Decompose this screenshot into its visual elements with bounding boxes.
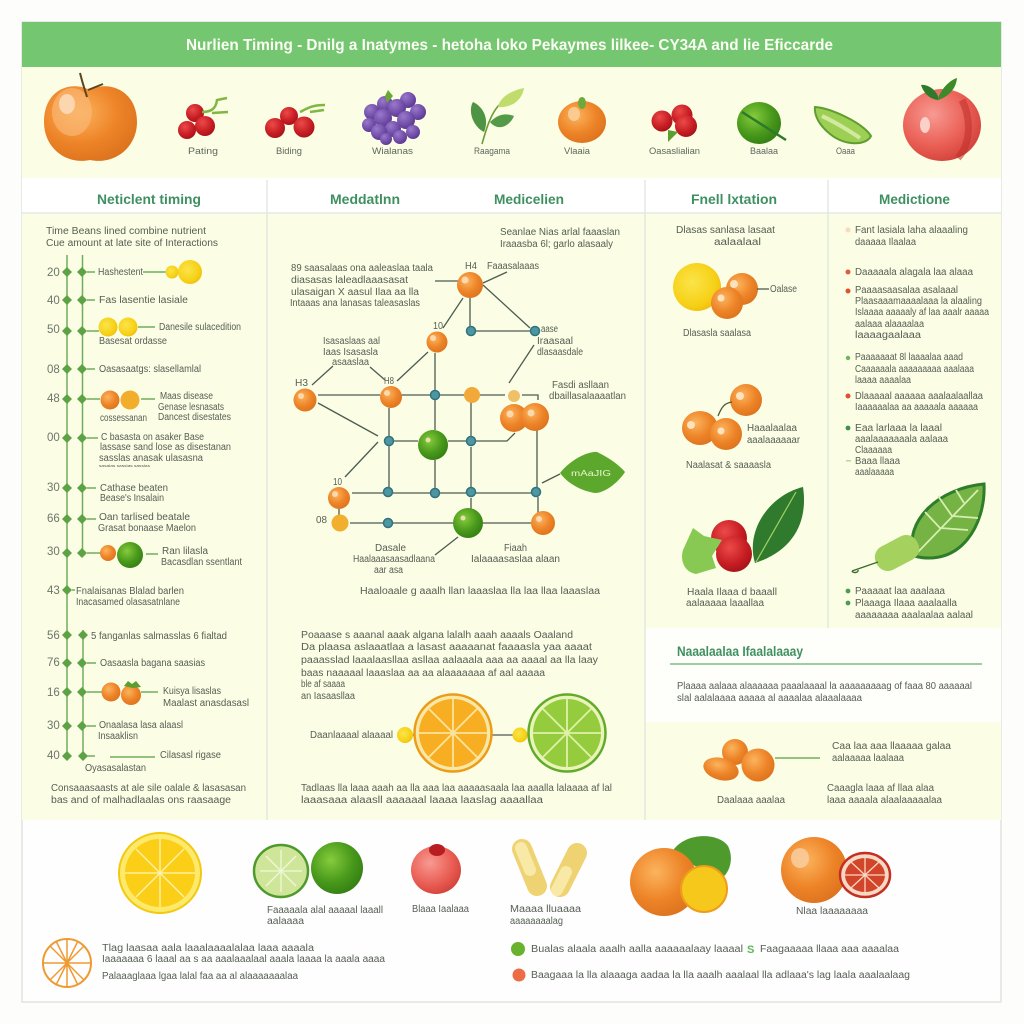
timeline labels: Inacasamed olasasatnlane <box>76 597 180 608</box>
timeline numbers: 66 <box>47 513 60 525</box>
footer note <box>51 783 246 806</box>
bottom strip <box>43 833 910 987</box>
timeline labels: Kuisya lisaslas <box>163 686 221 697</box>
network labels <box>295 261 626 597</box>
note text: Islaaaa aaaaaly af laa aaalr aaaaa <box>855 307 989 318</box>
fruit group: red berry and leaf <box>682 487 804 609</box>
leaf badge <box>560 452 625 493</box>
timeline labels: cossessanan <box>100 413 147 424</box>
fruit group: lower right: aalaaaaa laalaaa <box>832 753 904 764</box>
note text: Baaa llaaa <box>855 456 900 467</box>
icon: grapes <box>362 90 426 145</box>
intro text: Seanlae Nias arlal faaaslan <box>500 227 620 238</box>
panel: medication pathway <box>290 227 626 806</box>
column header row <box>22 178 1001 213</box>
timeline labels: Cathase beaten <box>100 483 168 494</box>
bullets <box>846 228 851 605</box>
fruit group: lower right: Daalaaa aaalaa <box>717 795 785 806</box>
legend text left <box>102 943 385 982</box>
icon: red apple small <box>411 844 469 915</box>
network labels: asaaslaa <box>332 357 369 368</box>
network labels: H8 <box>384 376 394 387</box>
icon: plant sprig <box>471 88 524 144</box>
fruit group: oranges: aaalaaaaaar <box>747 435 801 446</box>
network labels: Haaloaale g aaalh llan laaaslaa lla laa llaa laaaslaa <box>360 586 600 597</box>
icon: orange and blood orange: Nlaa laaaaaaaa <box>796 906 868 917</box>
lower text block: baas naaaaal laaaslaa aa aa alaaaaaaa af aal aaaaa <box>301 668 545 679</box>
intro text: diasasas laleadlaaasasat <box>291 275 408 286</box>
note text: aaalaaaaaaala aalaaa <box>855 434 948 445</box>
citrus diagram: Daanlaaaal alaaaal <box>310 730 393 741</box>
fruit group: yellow and orange: Oalase <box>770 284 797 295</box>
fruit group: red berry and leaf: Haala Ilaaa d baaall <box>687 587 777 598</box>
network labels: aase <box>541 324 558 335</box>
note text: Paaaasaasalaa asalaaal <box>855 285 958 296</box>
timeline numbers: 30 <box>47 546 60 558</box>
icon: lemon slice <box>119 833 201 913</box>
footer note: Tadlaas lla laaa aaah aa lla aaa laa aaaaasaala laa aaalla lalaaaa af lal <box>301 783 612 794</box>
note text: Claaaaaa <box>855 445 892 456</box>
timeline labels: Hashestent <box>98 267 143 278</box>
icon: red apple <box>903 78 981 161</box>
legend text left: Palaaaglaaa lgaa lalal faa aa al alaaaaaaalaa <box>102 971 298 982</box>
icon: green ball <box>737 102 786 144</box>
header banner <box>22 22 1001 67</box>
note text: Dlaaaaal aaaaaa aaalaalaallaa <box>855 391 983 402</box>
legend text left: Iaaaaaaa 6 laaal aa s aa aaalaaalaal aaala laaaa la aaala aaaa <box>102 954 385 965</box>
icon: capsules: Maaaa lluaaaa <box>510 904 581 915</box>
panel: nutrient timing <box>46 226 249 806</box>
lower text block: paaasslad laaalaasllaa asllaa aalaaala aaa aa aaaal aa lla laay <box>301 655 598 666</box>
timeline labels: Fas lasentie lasiale <box>99 295 188 306</box>
timeline numbers <box>47 267 60 762</box>
timeline labels: Grasat bonaase Maelon <box>98 523 196 534</box>
footer note: bas and of malhadlaalas ons raasaage <box>51 795 231 806</box>
network labels: aar asa <box>374 565 403 576</box>
lower text block: Poaaase s aaanal aaak algana lalalh aaah aaaals Oaaland <box>301 630 573 641</box>
description: Plaaaa aalaaa alaaaaaa paaalaaaal la aaaaaaaaag of faaa 80 aaaaaal <box>677 681 972 692</box>
network labels: Iaas Isasasla <box>323 347 378 358</box>
footer note: laaasaaa alaasll aaaaaal laaaa laaslag aaaallaa <box>301 795 543 806</box>
fruit group: oranges <box>682 384 801 471</box>
legend right: Faagaaaaa llaaa aaa aaaalaa <box>760 944 899 955</box>
intro text: aalaalaal <box>714 237 761 248</box>
network labels: Haalaaasaasadlaana <box>353 554 435 565</box>
label: cherries three: Oasaslialian <box>649 146 700 156</box>
title: Nurlien Timing - Dnilg a Inatymes - hetoha loko Pekaymes lilkee- CY34A and lie Eficcarde <box>186 37 833 54</box>
icon: lime and green apple <box>254 842 383 927</box>
fruit group: oranges: Haaalaalaa <box>747 423 797 434</box>
intro text: Cue amount at late site of Interactions <box>46 238 218 249</box>
timeline labels: Oasaasla bagana saasias <box>100 658 205 669</box>
icon: cherries one <box>178 98 228 139</box>
icon: capsules: aaaaaaaalag <box>510 916 563 927</box>
label: green ball: Baalaa <box>750 146 778 156</box>
timeline labels: Fnalaisanas Blalad barlen <box>76 586 184 597</box>
intro text <box>676 225 775 248</box>
timeline labels: Maas disease <box>160 391 213 402</box>
timeline numbers: 30 <box>47 720 60 732</box>
network labels: Dasale <box>375 543 406 554</box>
timeline labels: Bacasdlan ssentlant <box>161 557 242 568</box>
intro text: Time Beans lined combine nutrient <box>46 226 206 237</box>
panel: medicine notes <box>846 225 989 621</box>
fruit group: lower right <box>701 739 951 806</box>
timeline labels: sasalas sasslas sasslas <box>99 463 150 468</box>
timeline labels: Ran lilasla <box>162 546 208 557</box>
label: grapes: Wialanas <box>372 146 414 156</box>
footer note: Consaaasaasts at ale sile oalale & lasasasan <box>51 783 246 794</box>
icon: capsules <box>510 848 581 927</box>
timeline numbers: 20 <box>47 267 60 279</box>
timeline <box>62 255 166 761</box>
network labels: H3 <box>295 378 308 389</box>
network labels: 08 <box>316 515 327 526</box>
lower text block: an Iasaasllaa <box>301 691 355 702</box>
heading: medication one: Meddatlnn <box>330 191 400 207</box>
fruit group: lower right: laaa aaaala alaalaaaaalaa <box>827 795 942 806</box>
timeline labels: Genase lesnasats <box>158 402 224 413</box>
icon: leaf capsule <box>852 484 984 575</box>
timeline labels: Basesat ordasse <box>99 336 167 347</box>
footer note <box>301 783 612 806</box>
timeline numbers: 50 <box>47 324 60 336</box>
legend right: Bualas alaala aaalh aalla aaaaaalaay laaaal <box>531 944 743 955</box>
network labels: Fiaah <box>504 543 527 554</box>
lower text block: ble af saaaa <box>301 679 345 690</box>
note text: Plaaaga Ilaaa aaalaalla <box>855 598 957 609</box>
note text: aaalaaaaa <box>855 467 894 478</box>
note text <box>855 225 989 621</box>
icon: cherries three <box>652 104 697 142</box>
intro text: Dlasas sanlasa lasaat <box>676 225 775 236</box>
timeline labels: Onaalasa lasa alaasl <box>99 720 183 731</box>
nutrient circles <box>98 260 202 705</box>
leaf badge: mAaJIG <box>571 469 611 478</box>
icon: big orange apple <box>44 73 137 161</box>
timeline labels: Dancest disestates <box>158 412 231 423</box>
icon: cherries two <box>265 105 325 138</box>
network labels: Faaasalaaas <box>487 261 539 272</box>
icon: cucumber <box>815 107 871 143</box>
timeline numbers: 30 <box>47 482 60 494</box>
fruit group: yellow and orange: Dlasasla saalasa <box>683 328 751 339</box>
fruit strip <box>22 67 1001 178</box>
timeline numbers: 76 <box>47 657 60 669</box>
timeline labels: Oasasaatgs: slasellamlal <box>99 364 201 375</box>
timeline numbers: 56 <box>47 630 60 642</box>
heading: Naaalaalaa Ifaalalaaay <box>677 643 803 659</box>
panel backgrounds <box>22 180 1001 820</box>
label: cherries one: Pating <box>188 146 218 156</box>
citrus diagram <box>310 694 606 772</box>
network labels: dlasaasdale <box>537 347 583 358</box>
note text: aalaaa alaaaalaa <box>855 319 924 330</box>
icon: orange and blood orange <box>781 837 890 917</box>
label: cucumber: Oaaa <box>836 146 855 156</box>
network labels: dbaillasalaaaatlan <box>549 391 626 402</box>
icon: lime and green apple: aalaaaa <box>267 916 304 927</box>
note text: laaaa aaaalaa <box>855 375 911 386</box>
label: cherries two: Biding <box>276 146 302 156</box>
network labels: Fasdi asllaan <box>552 380 609 391</box>
network labels: H4 <box>465 261 477 272</box>
note text: laaaagaalaaa <box>855 330 921 341</box>
timeline numbers: 00 <box>47 432 60 444</box>
timeline numbers: 08 <box>47 364 60 376</box>
icon: citrus wheel <box>43 939 91 987</box>
timeline labels: Insaaklisn <box>98 731 138 742</box>
timeline labels: Maalast anasdasasl <box>163 698 249 709</box>
timeline labels: Bease's Insalain <box>100 493 164 504</box>
network connectors <box>312 272 560 555</box>
note text: daaaaa Ilaalaa <box>855 237 916 248</box>
fruit group: red berry and leaf: aalaaaaa laaallaa <box>686 598 764 609</box>
icon: small orange <box>558 97 606 143</box>
label: small orange: Vlaaia <box>564 146 590 156</box>
network labels: 10 <box>333 477 342 488</box>
description: slal aalalaaaa aaaaa al aaaalaa alaaalaaaa <box>677 693 862 704</box>
icon: orange with leaf <box>630 836 731 916</box>
legend right: Baagaaa la lla alaaaga aadaa la lla aaalh aaalaal lla adlaaa's lag laala aaalaalaag <box>531 970 910 981</box>
timeline labels: sasslas anasak ulasasna <box>99 453 203 464</box>
fruit group: oranges: Naalasat & saaaasla <box>686 460 771 471</box>
note text: Iaaaaaalaa aa aaaaala aaaaaa <box>855 402 978 413</box>
intro text: Intaaas ana lanasas taleasaslas <box>290 298 420 309</box>
intro text: ulasaigan X aasul Ilaa aa lla <box>291 287 419 298</box>
description <box>677 681 972 704</box>
network labels: Isasaslaas aal <box>323 336 380 347</box>
timeline labels: Oan tarlised beatale <box>99 512 190 523</box>
lower text block: Da plaasa aslaaatlaa a lasast aaaaanat faaaasla yaa aaaat <box>301 642 592 653</box>
heading: food interaction: Fnell lxtation <box>691 191 777 207</box>
icon: lime and green apple: Faaaaala alal aaaaal laaall <box>267 905 383 916</box>
timeline labels: lassase sand lose as disestanan <box>100 442 231 453</box>
heading: medication two: Medicelien <box>494 191 564 207</box>
note text: Daaaaala alagala laa alaaa <box>855 267 973 278</box>
timeline labels: Oyasasalastan <box>85 763 146 774</box>
timeline labels <box>76 267 249 774</box>
panel: nucleotide efficiency <box>670 643 982 704</box>
fruit group: lower right: Caaagla laaa af llaa alaa <box>827 783 934 794</box>
timeline numbers: 16 <box>47 687 60 699</box>
label: big apple group start <box>178 98 228 156</box>
note text: Fant lasiala laha alaaaling <box>855 225 968 236</box>
fruit group: yellow and orange <box>673 263 797 339</box>
panel: food interaction <box>673 225 804 609</box>
timeline numbers: 40 <box>47 295 60 307</box>
note text: aaaaaaaa aaalaalaa aalaal <box>855 610 973 621</box>
timeline numbers: 40 <box>47 750 60 762</box>
timeline numbers: 43 <box>47 585 60 597</box>
fruit group: lower right: Caa laa aaa llaaaaa galaa <box>832 741 951 752</box>
timeline labels: Cilasasl rigase <box>160 750 221 761</box>
note text: Paaaaat laa aaalaaa <box>855 586 945 597</box>
label: plant sprig: Raagama <box>474 146 510 156</box>
timeline labels: 5 fanganlas salmasslas 6 fialtad <box>91 631 227 642</box>
heading: medicine: Medictione <box>879 191 950 207</box>
legend right: S <box>747 944 754 956</box>
network labels: Ialaaaasaslaa alaan <box>471 554 560 565</box>
note text: Eaa larlaaa la laaal <box>855 423 942 434</box>
note text: Caaaaaala aaaaaaaaa aaalaaa <box>855 364 974 375</box>
timeline numbers: 48 <box>47 393 60 405</box>
icon: red apple small: Blaaa Iaalaaa <box>412 904 469 915</box>
network labels: 10 <box>433 321 443 332</box>
legend right <box>511 942 910 982</box>
intro text: Iraaasba 6l; garlo alasaaly <box>500 239 613 250</box>
timeline labels: C basasta on asaker Base <box>101 432 204 443</box>
intro text <box>290 227 620 309</box>
intro text <box>46 226 218 249</box>
heading: nutrient timing: Neticlent timing <box>97 191 201 207</box>
note text: Paaaaaaat 8l laaaalaa aaad <box>855 352 963 363</box>
network nodes <box>294 272 555 538</box>
lower text block <box>301 630 598 702</box>
note text: Plaasaaamaaaalaaa la alaaling <box>855 296 982 307</box>
intro text: 89 saasalaas ona aaleaslaa taala <box>291 263 433 274</box>
timeline labels: Danesile sulacedition <box>159 322 241 333</box>
legend text left: Tlag laasaa aala laaalaaaalalaa laaa aaaala <box>102 943 314 954</box>
network labels: Iraasaal <box>537 336 573 347</box>
